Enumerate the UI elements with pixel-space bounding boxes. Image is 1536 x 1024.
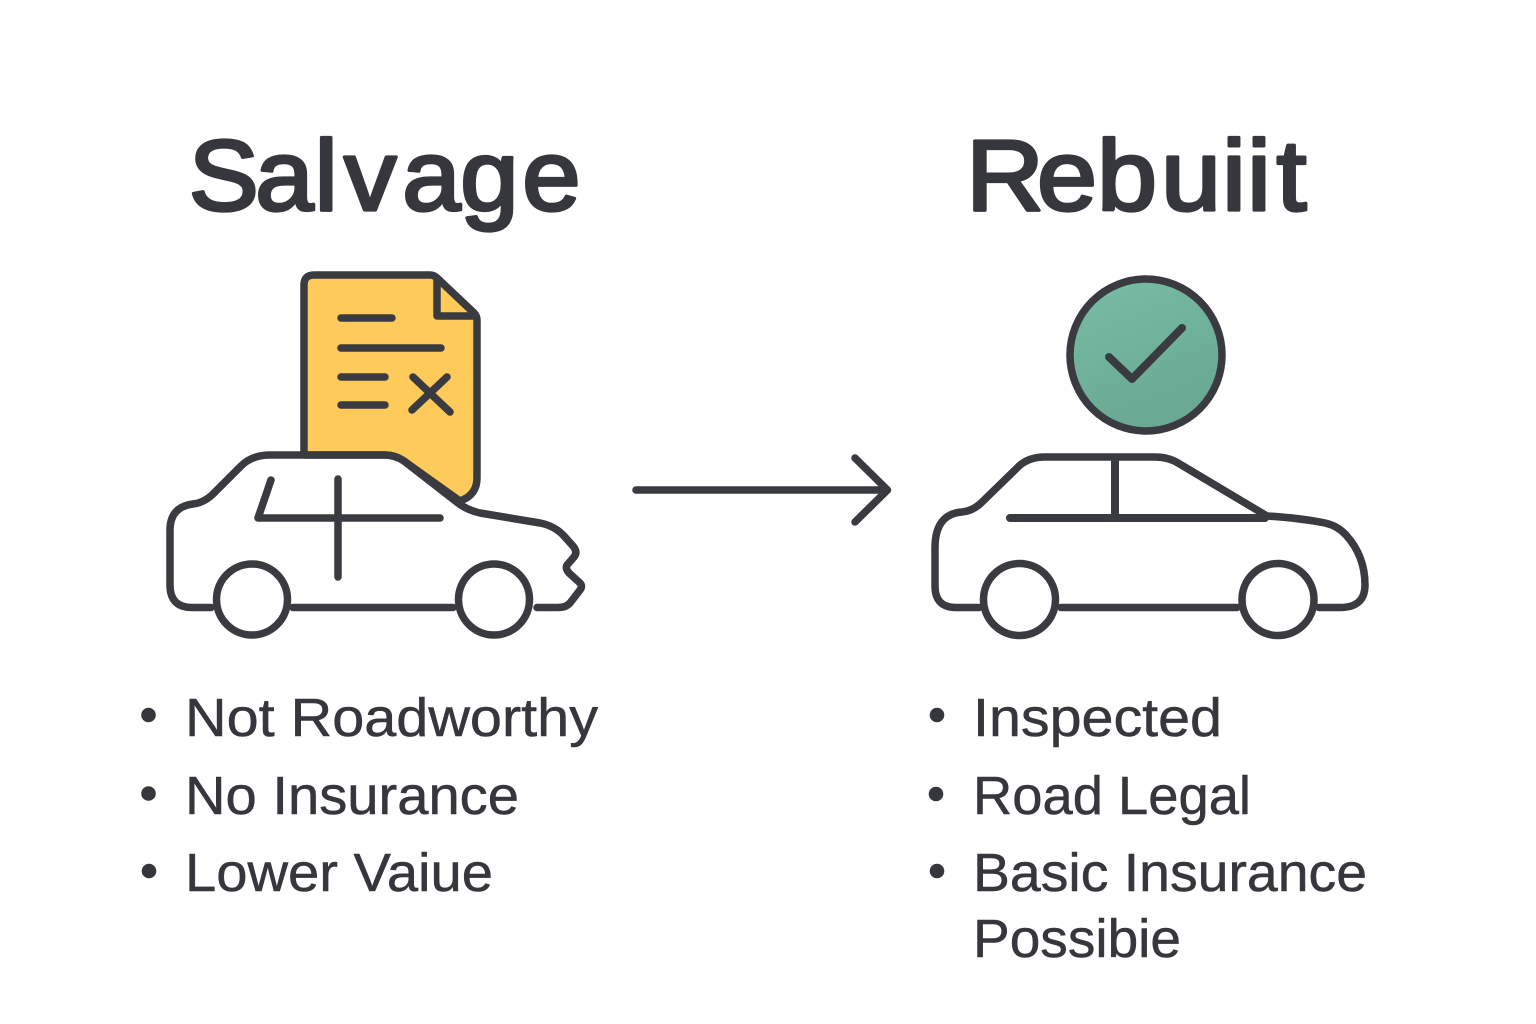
list: salvage points: Lower Vaiue — [185, 843, 493, 903]
list: rebuilt points: Possibie — [973, 909, 1181, 969]
icon: rebuilt car — [935, 457, 1365, 636]
icon: damaged salvage car — [170, 455, 582, 635]
list: salvage points: No Insurance — [185, 766, 519, 826]
list: rebuilt points: Road Legal — [973, 766, 1251, 826]
icon: salvage document — [304, 275, 477, 501]
list: salvage points — [141, 688, 598, 903]
arrow — [636, 458, 888, 522]
list: rebuilt points: Basic Insurance — [973, 843, 1367, 903]
list: salvage points: Not Roadworthy — [185, 688, 598, 748]
heading: Salvage: Salvage — [189, 119, 581, 231]
list: rebuilt points — [929, 688, 1367, 969]
list: rebuilt points: Inspected — [973, 688, 1222, 748]
icon: green check badge — [1070, 279, 1222, 431]
heading: Rebuilt: Rebuiit — [966, 121, 1307, 232]
